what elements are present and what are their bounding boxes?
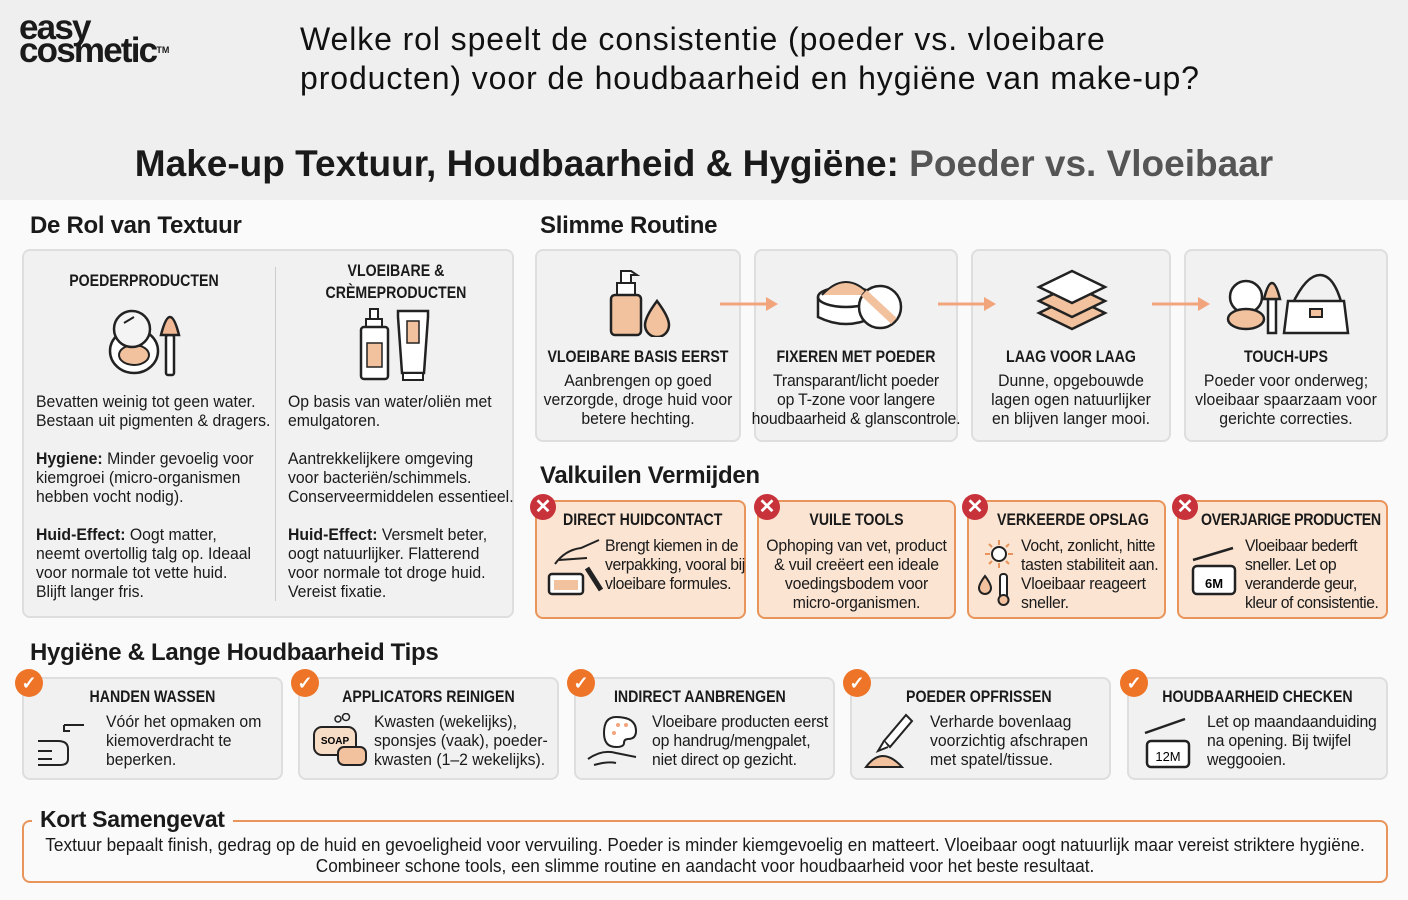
text: powder description: Bevatten weinig tot geen water. bbox=[36, 393, 255, 411]
tip: applicators reinigen: APPLICATORS REINIGEN bbox=[342, 687, 515, 706]
tip: poeder opfrissen: POEDER OPFRISSEN bbox=[906, 687, 1052, 706]
summary text: Textuur bepaalt finish, gedrag op de huid en gevoeligheid voor vervuiling. Poeder is minder kiemgevoelig en matteert. Vloeibaar oogt natuurlijk maar vereist striktere hygiëne. bbox=[45, 835, 1365, 855]
card: vloeibare basis eerst: Aanbrengen op goed bbox=[564, 372, 712, 390]
warning: overjarige producten: veranderde geur, bbox=[1245, 575, 1357, 593]
icon: check: ✓ bbox=[21, 673, 37, 693]
icon: error x bbox=[1172, 494, 1198, 520]
text: powder description: Hygiene: Minder gevoelig voor bbox=[36, 450, 254, 468]
tip: houdbaarheid checken: 12M bbox=[1155, 749, 1181, 764]
text: liquid description: Conserveermiddelen essentieel. bbox=[288, 488, 514, 506]
icon: check: ✓ bbox=[573, 673, 589, 693]
icon: check: ✓ bbox=[297, 673, 313, 693]
summary text: Combineer schone tools, een slimme routine en aandacht voor houdbaarheid voor het beste resultaat. bbox=[316, 856, 1094, 876]
tip: houdbaarheid checken: weggooien. bbox=[1207, 751, 1286, 769]
card: vloeibare basis eerst: VLOEIBARE BASIS EERST bbox=[547, 347, 728, 366]
text: liquid description: Huid-Effect: Versmelt beter, bbox=[288, 526, 487, 544]
card: touch-ups bbox=[1184, 249, 1388, 442]
icon: bottle and tube bbox=[360, 308, 430, 381]
text: powder description: hebben vocht nodig). bbox=[36, 488, 183, 506]
warning: overjarige producten: kleur of consistentie. bbox=[1245, 594, 1378, 612]
tip: handen wassen bbox=[22, 677, 283, 780]
tip: indirect aanbrengen bbox=[574, 677, 835, 780]
icon: check bbox=[15, 669, 43, 697]
tip: poeder opfrissen: Verharde bovenlaag bbox=[930, 713, 1071, 731]
card: laag voor laag bbox=[971, 249, 1171, 442]
arrow bbox=[938, 297, 996, 311]
tip: houdbaarheid checken bbox=[1127, 677, 1388, 780]
warning: overjarige producten: sneller. Let op bbox=[1245, 556, 1336, 574]
logo: cosmeticTM bbox=[19, 31, 169, 70]
text: liquid description bbox=[288, 393, 514, 601]
tip: applicators reinigen: SOAP bbox=[321, 736, 349, 747]
heading: vloeibare: VLOEIBARE & bbox=[348, 261, 444, 280]
card: touch-ups: Poeder voor onderweg; bbox=[1204, 372, 1368, 390]
warning: verkeerde opslag: Vloeibaar reageert bbox=[1021, 575, 1146, 593]
card: laag voor laag: en blijven langer mooi. bbox=[992, 410, 1150, 428]
text: powder description: Huid-Effect: Oogt matter, bbox=[36, 526, 217, 544]
tip: indirect aanbrengen: niet direct op gezicht. bbox=[652, 751, 797, 769]
arrow bbox=[720, 297, 778, 311]
tip: applicators reinigen: sponsjes (vaak), poeder- bbox=[374, 732, 548, 750]
section heading: De Rol van Textuur: De Rol van Textuur bbox=[30, 212, 242, 239]
text: powder description: Blijft langer fris. bbox=[36, 583, 144, 601]
card: vloeibare basis eerst: betere hechting. bbox=[581, 410, 695, 428]
icon: check bbox=[843, 669, 871, 697]
warning: vuile tools: Ophoping van vet, product bbox=[766, 537, 947, 555]
tip: applicators reinigen: kwasten (1–2 wekelijks). bbox=[374, 751, 545, 769]
icon: error x bbox=[530, 494, 556, 520]
warning: overjarige producten: 6M bbox=[1205, 576, 1223, 591]
text: powder description: voor normale tot vette huid. bbox=[36, 564, 227, 582]
summary heading: Kort Samengevat bbox=[40, 806, 225, 832]
panel: texture comparison bbox=[22, 249, 514, 618]
card: vloeibare basis eerst bbox=[535, 249, 741, 442]
warning: vuile tools: VUILE TOOLS bbox=[809, 510, 904, 529]
text: liquid description: Op basis van water/oliën met bbox=[288, 393, 492, 411]
heading: vloeibare bbox=[326, 261, 466, 302]
section heading: Slimme Routine: Slimme Routine bbox=[540, 212, 717, 239]
icon: check bbox=[1120, 669, 1148, 697]
warning: verkeerde opslag: Vocht, zonlicht, hitte bbox=[1021, 537, 1155, 555]
tip: handen wassen: Vóór het opmaken om bbox=[106, 713, 261, 731]
text: powder description: kiemgroei (micro-organismen bbox=[36, 469, 240, 487]
card: touch-ups: gerichte correcties. bbox=[1219, 410, 1353, 428]
main title: Make-up Textuur, Houdbaarheid & Hygiëne: Poeder vs. Vloeibaar bbox=[135, 143, 1273, 184]
warning: verkeerde opslag bbox=[967, 500, 1166, 619]
logo bbox=[19, 8, 169, 70]
warning: vuile tools: micro-organismen. bbox=[793, 594, 920, 612]
heading: poederproducten: POEDERPRODUCTEN bbox=[69, 271, 219, 290]
warning: verkeerde opslag: VERKEERDE OPSLAG bbox=[997, 510, 1149, 529]
tip: handen wassen: beperken. bbox=[106, 751, 176, 769]
tip: indirect aanbrengen: op handrug/mengpalet, bbox=[652, 732, 810, 750]
icon: error x: ✕ bbox=[967, 496, 983, 518]
warning: vuile tools: voedingsbodem voor bbox=[785, 575, 928, 593]
card: vloeibare basis eerst: verzorgde, droge huid voor bbox=[544, 391, 732, 409]
card: fixeren met poeder: op T-zone voor langere bbox=[777, 391, 935, 409]
icon: check bbox=[567, 669, 595, 697]
icon: check bbox=[291, 669, 319, 697]
section heading: Hygiene tips: Hygiëne & Lange Houdbaarheid Tips bbox=[30, 639, 438, 666]
text: liquid description: emulgatoren. bbox=[288, 412, 380, 430]
text: liquid description: voor normale tot droge huid. bbox=[288, 564, 486, 582]
warning: verkeerde opslag: tasten stabiliteit aan. bbox=[1021, 556, 1158, 574]
tip: handen wassen: kiemoverdracht te bbox=[106, 732, 232, 750]
card: fixeren met poeder: houdbaarheid & glanscontrole. bbox=[752, 410, 960, 428]
icon: error x: ✕ bbox=[1177, 496, 1193, 518]
card: laag voor laag: LAAG VOOR LAAG bbox=[1006, 347, 1136, 366]
warning: direct huidcontact: DIRECT HUIDCONTACT bbox=[563, 510, 722, 529]
warning: overjarige producten: OVERJARIGE PRODUCTEN bbox=[1201, 510, 1381, 529]
card: fixeren met poeder bbox=[754, 249, 958, 442]
card: touch-ups: TOUCH-UPS bbox=[1244, 347, 1328, 366]
text: powder description bbox=[36, 393, 270, 601]
summary text bbox=[45, 835, 1365, 876]
warning: overjarige producten bbox=[1177, 500, 1388, 619]
warning: vuile tools bbox=[757, 500, 956, 619]
logo: easy bbox=[19, 8, 90, 47]
question heading: Welke rol speelt de consistentie (poeder vs. vloeibare bbox=[300, 21, 1106, 57]
icon: error x bbox=[962, 494, 988, 520]
question heading bbox=[300, 21, 1200, 96]
tip: poeder opfrissen: met spatel/tissue. bbox=[930, 751, 1053, 769]
heading: vloeibare: CRÈMEPRODUCTEN bbox=[326, 283, 466, 302]
text: liquid description: Vereist fixatie. bbox=[288, 583, 386, 601]
tip: houdbaarheid checken: HOUDBAARHEID CHECKEN bbox=[1162, 687, 1353, 706]
tip: poeder opfrissen: voorzichtig afschrapen bbox=[930, 732, 1088, 750]
icon: error x: ✕ bbox=[535, 496, 551, 518]
section heading: Valkuilen Vermijden: Valkuilen Vermijden bbox=[540, 462, 760, 489]
card: laag voor laag: lagen ogen natuurlijker bbox=[991, 391, 1151, 409]
warning: overjarige producten: Vloeibaar bederft bbox=[1245, 537, 1357, 555]
warning: direct huidcontact: vloeibare formules. bbox=[605, 575, 731, 593]
warning: direct huidcontact bbox=[535, 500, 746, 619]
tip: applicators reinigen: Kwasten (wekelijks), bbox=[374, 713, 517, 731]
card: fixeren met poeder: Transparant/licht poeder bbox=[773, 372, 939, 390]
header band bbox=[0, 0, 1408, 200]
icon: compact and brush bbox=[108, 310, 181, 376]
icon: error x: ✕ bbox=[759, 496, 775, 518]
text: powder description: Bestaan uit pigmenten & dragers. bbox=[36, 412, 270, 430]
warning: vuile tools: & vuil creëert een ideale bbox=[774, 556, 939, 574]
summary box bbox=[22, 820, 1388, 883]
icon: error x bbox=[754, 494, 780, 520]
icon: check: ✓ bbox=[1126, 673, 1142, 693]
icon: check: ✓ bbox=[849, 673, 865, 693]
tip: poeder opfrissen bbox=[850, 677, 1111, 780]
tip: applicators reinigen bbox=[298, 677, 559, 780]
warning: direct huidcontact: verpakking, vooral bij bbox=[605, 556, 745, 574]
card: laag voor laag: Dunne, opgebouwde bbox=[998, 372, 1144, 390]
card: touch-ups: vloeibaar spaarzaam voor bbox=[1195, 391, 1377, 409]
text: liquid description: oogt natuurlijker. Flatterend bbox=[288, 545, 479, 563]
tip: indirect aanbrengen: Vloeibare producten eerst bbox=[652, 713, 828, 731]
tip: handen wassen: HANDEN WASSEN bbox=[89, 687, 215, 706]
card: fixeren met poeder: FIXEREN MET POEDER bbox=[776, 347, 935, 366]
tip: indirect aanbrengen: INDIRECT AANBRENGEN bbox=[614, 687, 786, 706]
text: powder description: neemt overtollig talg op. Ideaal bbox=[36, 545, 251, 563]
arrow bbox=[1152, 297, 1210, 311]
warning: verkeerde opslag: sneller. bbox=[1021, 594, 1069, 612]
warning: direct huidcontact: Brengt kiemen in de bbox=[605, 537, 738, 555]
question heading: producten) voor de houdbaarheid en hygiëne van make-up? bbox=[300, 60, 1200, 96]
tip: houdbaarheid checken: Let op maandaanduiding bbox=[1207, 713, 1377, 731]
text: liquid description: Aantrekkelijkere omgeving bbox=[288, 450, 473, 468]
text: liquid description: voor bacteriën/schimmels. bbox=[288, 469, 471, 487]
tip: houdbaarheid checken: na opening. Bij twijfel bbox=[1207, 732, 1351, 750]
